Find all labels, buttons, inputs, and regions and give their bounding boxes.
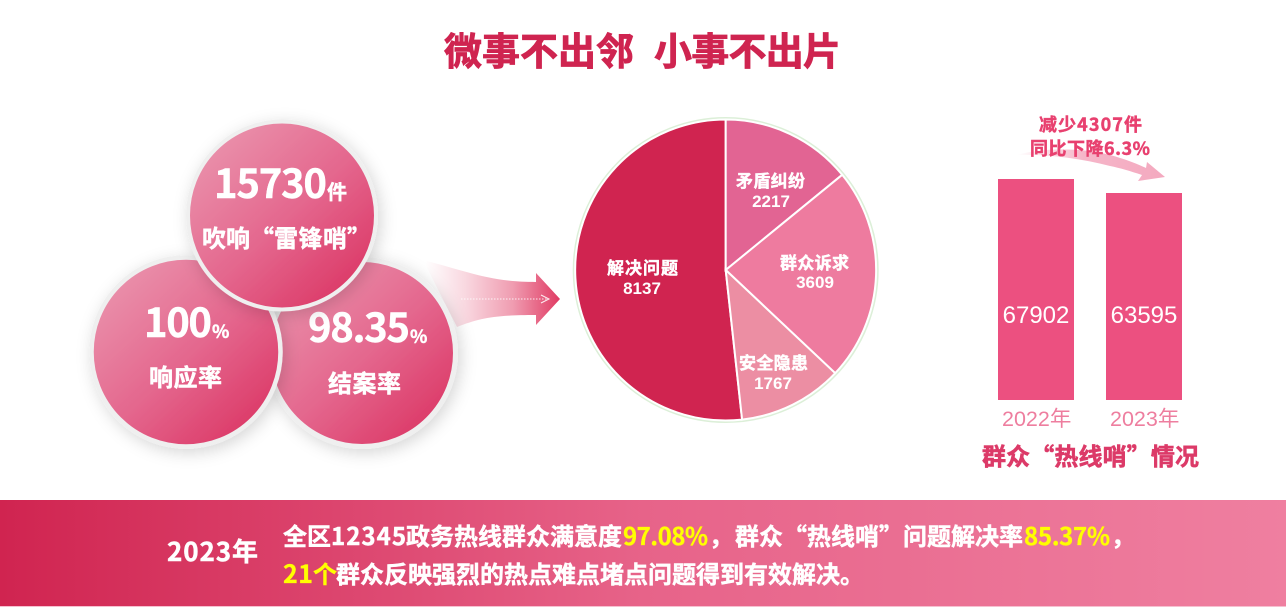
panel: circle 98.35% closure rate [268, 260, 456, 446]
bar: 2023 [1106, 193, 1182, 431]
panel: circle 100% response rate [92, 258, 280, 446]
title [444, 21, 841, 76]
pie slice: 解决问题 [575, 119, 742, 420]
pie label: 安全隐患: 1767 [754, 374, 792, 393]
pie label: 群众诉求 [780, 249, 849, 292]
banner text line 1: 12345 [331, 517, 406, 552]
banner text line 1: ， [1111, 517, 1135, 552]
banner text line 1: 热线哨 [807, 517, 879, 552]
pie label: 解决问题: 8137 [623, 279, 661, 298]
panel: circle 15730 whistle calls: 吹响 [202, 219, 250, 254]
chart caption: 群众“热线哨”情况 [982, 437, 1199, 472]
pie label: 矛盾纠纷: 矛盾纠纷 [736, 167, 805, 192]
bottom banner [0, 500, 1286, 607]
pie slice: 安全隐患 [726, 270, 835, 420]
callout: decrease text: 减少4307件 [1039, 111, 1142, 137]
bar: 2022 [998, 179, 1074, 431]
bar: 2023: 2023年 [1110, 407, 1179, 431]
banner text line 1: “ [783, 517, 807, 552]
banner text line 1: 85.37% [1024, 517, 1110, 552]
banner text line 2: 个 [313, 555, 337, 590]
title: 小事不出片 [654, 21, 841, 76]
pie label: 解决问题 [607, 254, 678, 298]
panel: circle 15730 whistle calls: “ [250, 219, 274, 254]
panel: circle 98.35% closure rate: 98.35 [308, 296, 410, 354]
pie label: 矛盾纠纷: 2217 [752, 192, 790, 211]
banner text line 1: ” [879, 517, 903, 552]
panel: circle 98.35% closure rate: % [410, 323, 427, 349]
panel: circle 100% response rate: 响应率 [149, 358, 222, 393]
panel: circle 100% response rate: % [212, 318, 229, 344]
arrow: circles to pie chart [423, 260, 560, 327]
panel: circle 15730 whistle calls: 15730 [214, 152, 327, 210]
bar: 2023: 63595 [1111, 302, 1177, 329]
banner text line 2: 21 [283, 555, 313, 591]
banner text line 1: 全区 [283, 517, 331, 552]
callout: decrease text [1030, 111, 1150, 161]
pie chart [574, 118, 878, 422]
panel: circle 15730 whistle calls: ” [347, 219, 371, 254]
arrow: year-on-year decrease [1017, 149, 1165, 181]
panel: circle 15730 whistle calls [188, 122, 376, 310]
pie slice: 矛盾纠纷 [726, 120, 842, 270]
title: 微事不出邻 [444, 21, 634, 76]
panel: circle 15730 whistle calls: 件 [327, 176, 347, 205]
pie label: 解决问题: 解决问题 [607, 254, 678, 279]
banner text line 1: ， [709, 517, 733, 552]
pie label: 安全隐患: 安全隐患 [739, 349, 808, 374]
pie slice: 群众诉求 [726, 175, 876, 373]
banner text line 1: 97.08% [623, 517, 708, 552]
banner text line 2: 群众反映强烈的热点难点堵点问题得到有效解决。 [336, 555, 864, 590]
panel: circle 98.35% closure rate: 结案率 [328, 364, 401, 399]
bar: 2022: 67902 [1003, 302, 1069, 329]
pie label: 安全隐患 [739, 349, 808, 393]
banner text line 1: 政务热线群众满意度 [406, 517, 622, 552]
panel: circle 15730 whistle calls: 雷锋哨 [274, 219, 347, 254]
pie label: 群众诉求: 3609 [796, 273, 834, 292]
pie label: 矛盾纠纷 [736, 167, 805, 211]
banner text line 1 [283, 517, 1135, 552]
callout: decrease text: 同比下降6.3% [1030, 135, 1150, 161]
banner text line 1: 问题解决率 [903, 517, 1023, 552]
banner year: 2023年 [167, 532, 258, 569]
bar chart [998, 179, 1182, 431]
banner text line 1: 群众 [735, 517, 783, 552]
panel: circle 100% response rate: 100 [144, 291, 212, 349]
pie label: 群众诉求: 群众诉求 [780, 249, 849, 274]
bar: 2022: 2022年 [1002, 407, 1071, 431]
